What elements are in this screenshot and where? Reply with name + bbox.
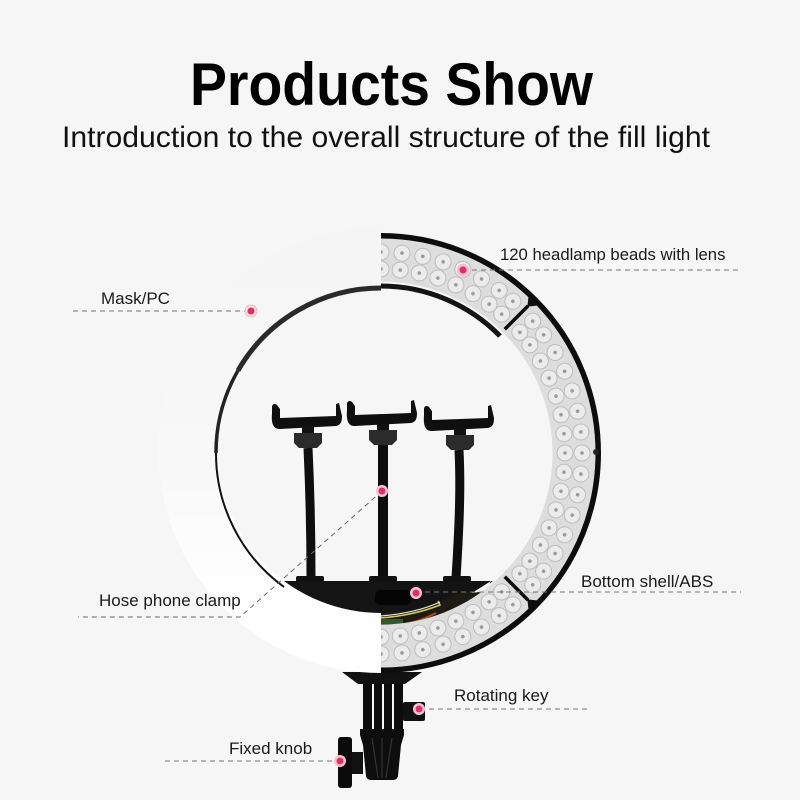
clamp right	[424, 405, 494, 582]
callout: Fixed knob: Fixed knob	[229, 739, 312, 758]
clamp left	[272, 403, 342, 582]
callout: Hose phone clamp: Hose phone clamp	[99, 591, 241, 610]
right half: lamp panel with beads	[381, 233, 601, 672]
mask: left half white diffuser	[220, 581, 381, 673]
subtitle: Introduction to the overall structure of the fill light	[62, 121, 711, 154]
callout: Hose phone clamp	[78, 485, 388, 617]
callout: 120 headlamp beads with lens: 120 headlamp beads with lens	[500, 245, 725, 264]
callout: Bottom shell/ABS	[410, 572, 741, 599]
ring light	[214, 233, 601, 788]
callout: Rotating key	[413, 686, 588, 715]
LED beads	[373, 244, 590, 662]
callout: Mask/PC: Mask/PC	[101, 289, 170, 308]
phone clamp hoses	[272, 400, 494, 582]
panel dividers	[505, 294, 540, 612]
callout: Mask/PC	[73, 289, 257, 317]
callout: Rotating key: Rotating key	[454, 686, 549, 705]
callout: Bottom shell/ABS: Bottom shell/ABS	[581, 572, 713, 591]
stand: rotating joint and base	[338, 672, 425, 788]
callout: 120 headlamp beads with lens	[457, 245, 740, 276]
exposed circuit board and wires	[381, 581, 491, 628]
clamp middle	[347, 400, 417, 582]
callout: Fixed knob	[165, 739, 346, 767]
bottom black bar	[269, 581, 493, 623]
left black inner rim	[216, 288, 381, 587]
title: Products Show	[190, 51, 593, 118]
